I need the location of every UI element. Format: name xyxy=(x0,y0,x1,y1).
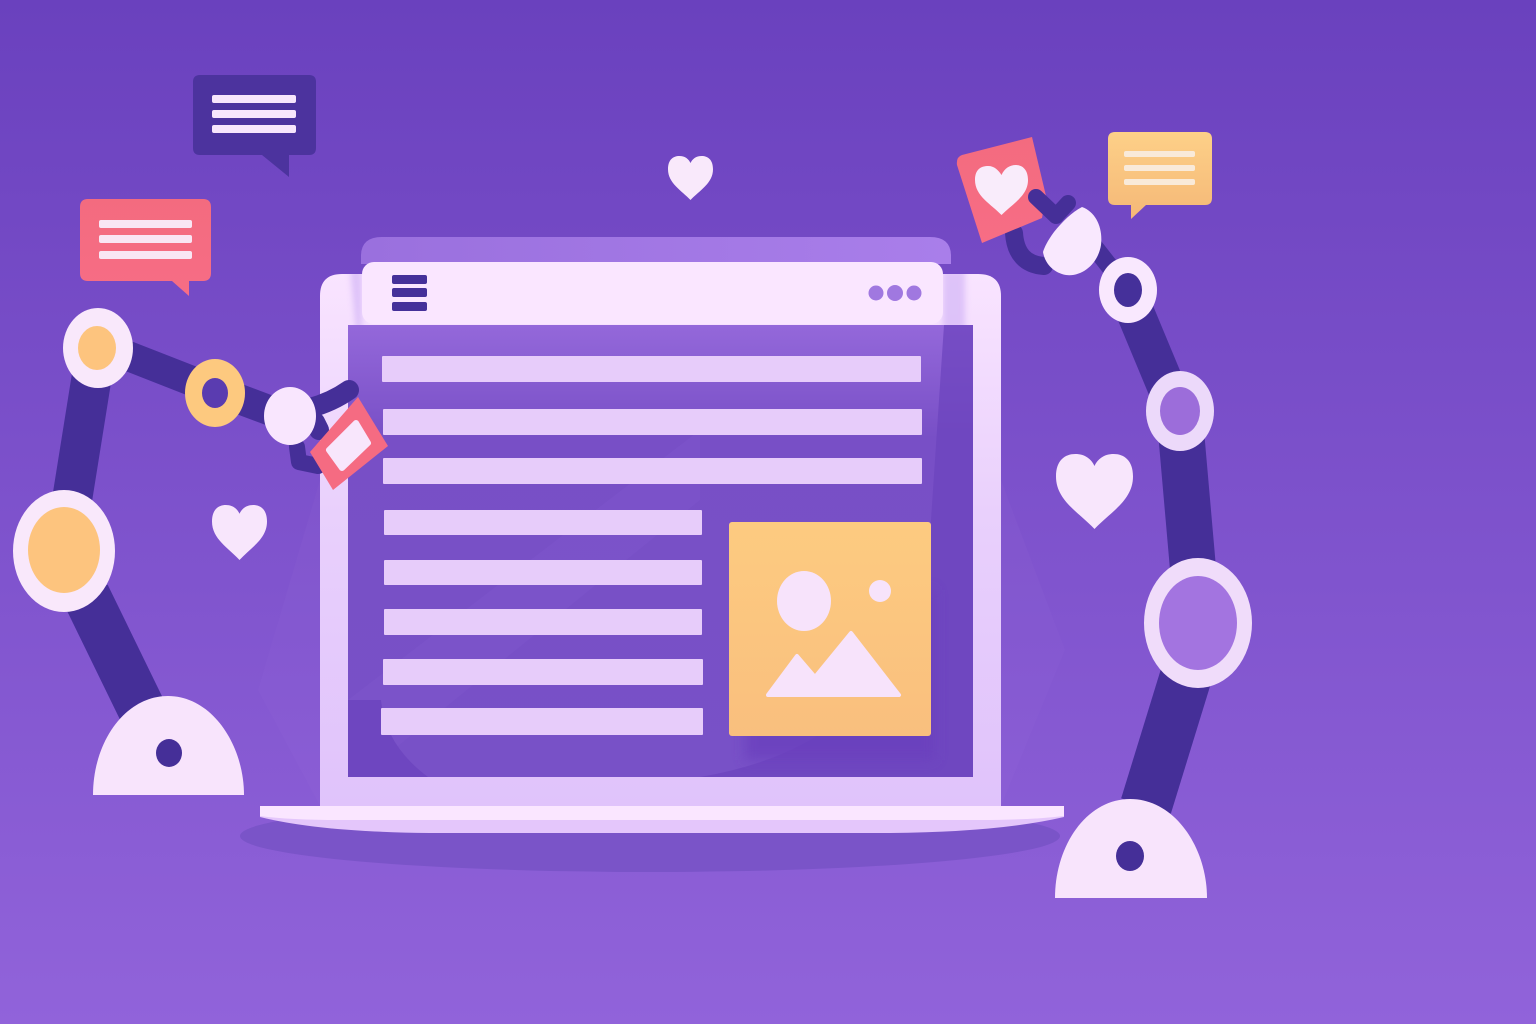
shoulder joint xyxy=(63,308,133,388)
base xyxy=(1055,799,1207,898)
screen corner shade xyxy=(348,700,428,777)
arm segments xyxy=(1085,235,1194,806)
card heart xyxy=(975,165,1028,215)
elbow joint xyxy=(185,359,245,427)
lower gripper finger xyxy=(1014,233,1044,266)
upper gripper finger xyxy=(1036,197,1068,216)
sun xyxy=(777,571,831,631)
right robot arm xyxy=(957,137,1252,898)
laptop base xyxy=(260,806,1064,833)
mountains xyxy=(768,633,899,695)
heart: left xyxy=(212,505,267,560)
left robot arm xyxy=(13,308,388,795)
wrist joint xyxy=(264,387,316,445)
lower joint xyxy=(13,490,115,612)
laptop shadow xyxy=(240,800,1060,872)
browser top bar xyxy=(362,262,943,324)
tab shadow on lid xyxy=(348,274,967,325)
laptop xyxy=(260,237,1064,833)
speech bubble: dark xyxy=(193,75,316,177)
screen xyxy=(348,325,973,777)
middle joint xyxy=(1146,371,1214,451)
gripper xyxy=(297,390,349,466)
held card xyxy=(310,397,388,490)
lower joint xyxy=(1144,558,1252,688)
speech bubble: coral xyxy=(80,199,211,296)
laptop glow xyxy=(258,480,1065,806)
full-width text lines xyxy=(382,356,922,484)
speech bubble: amber xyxy=(1108,132,1212,219)
arm segments xyxy=(72,345,290,712)
wrist head xyxy=(1043,207,1101,275)
heart: right xyxy=(1056,454,1133,529)
window dots xyxy=(868,285,922,301)
small moon xyxy=(869,580,891,602)
image card xyxy=(729,522,931,736)
short text lines xyxy=(381,510,703,735)
base xyxy=(93,696,244,795)
menu icon xyxy=(392,275,427,311)
upper joint xyxy=(1099,257,1157,323)
laptop frame xyxy=(320,274,1001,806)
heart: top xyxy=(668,156,713,200)
image card shadow xyxy=(745,590,935,760)
browser tab backdrop xyxy=(361,237,951,264)
held heart card xyxy=(957,137,1046,243)
